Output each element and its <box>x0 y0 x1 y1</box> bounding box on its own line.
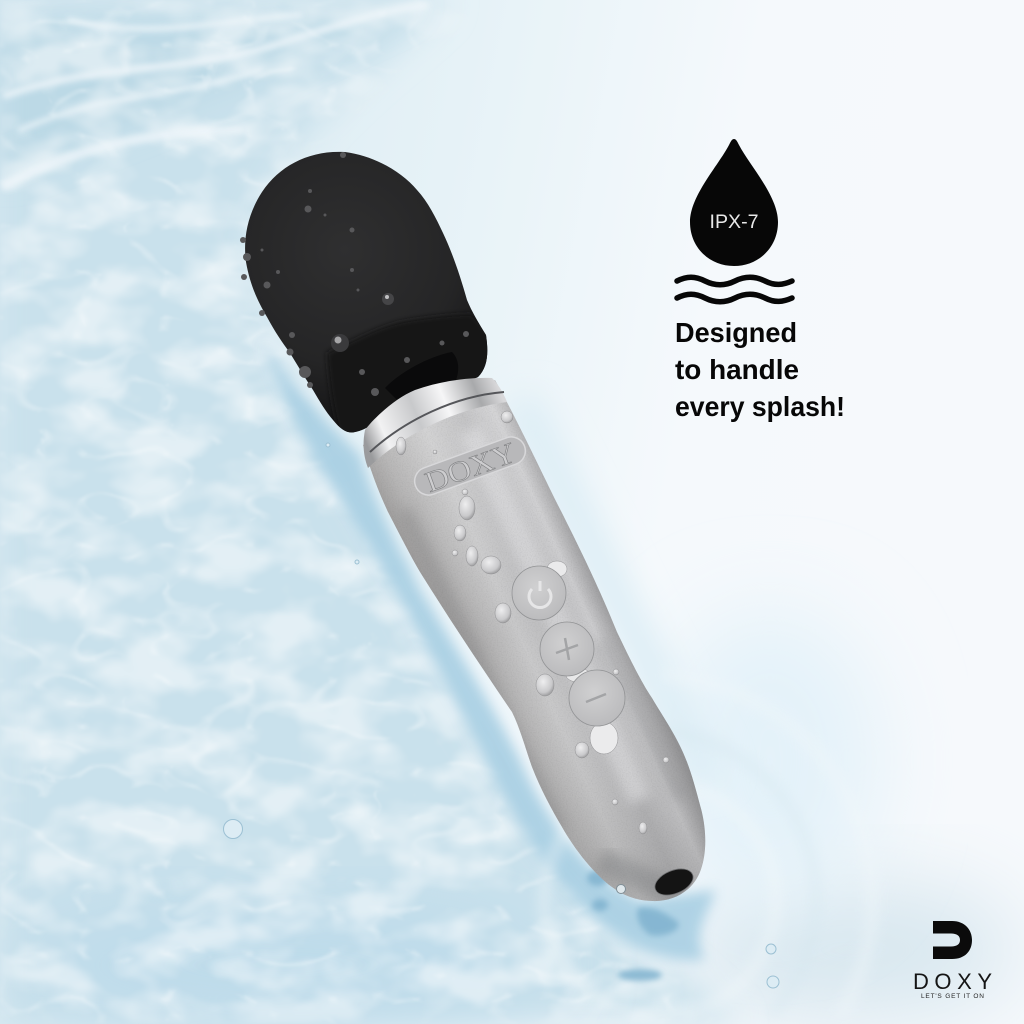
top left streaks <box>6 6 425 185</box>
DOXY logo <box>913 921 992 1000</box>
IPX-7 callout <box>675 139 845 422</box>
droplet at tip <box>616 884 626 894</box>
headline: every splash! <box>675 391 845 422</box>
top left blue band <box>0 0 420 175</box>
logo mark <box>933 921 972 959</box>
soft tint beside the handle <box>520 400 710 780</box>
wordmark: DOXY <box>913 969 992 994</box>
icon: water drop: IPX-7 <box>710 212 758 233</box>
charging port <box>651 864 697 900</box>
embossed logo <box>411 433 531 503</box>
tagline: LET'S GET IT ON <box>921 993 984 1000</box>
lower right tint <box>680 880 1020 1020</box>
base step <box>327 314 495 437</box>
dark pools under tip <box>587 870 679 981</box>
minus button <box>569 670 625 726</box>
headline: to handle <box>675 354 799 385</box>
blue pool along handle <box>262 340 715 960</box>
neck socket <box>385 352 458 408</box>
headline <box>675 317 845 422</box>
product: wand massager <box>240 152 720 910</box>
chrome ring <box>364 378 507 468</box>
embossed logo: DOXY <box>421 437 520 499</box>
icon: waves <box>677 277 792 302</box>
left water body <box>0 0 740 1024</box>
icon: water drop <box>690 139 778 266</box>
power button <box>512 566 566 620</box>
droplets on water <box>224 443 779 988</box>
plus button <box>540 622 594 676</box>
water droplets on head <box>240 152 469 396</box>
silicone head <box>240 152 495 437</box>
brushed metal handle <box>363 378 706 902</box>
ripples around the tip <box>544 675 872 1016</box>
water droplets on handle <box>396 411 669 834</box>
headline: Designed <box>675 317 797 348</box>
white caustic ripples <box>0 0 676 1024</box>
